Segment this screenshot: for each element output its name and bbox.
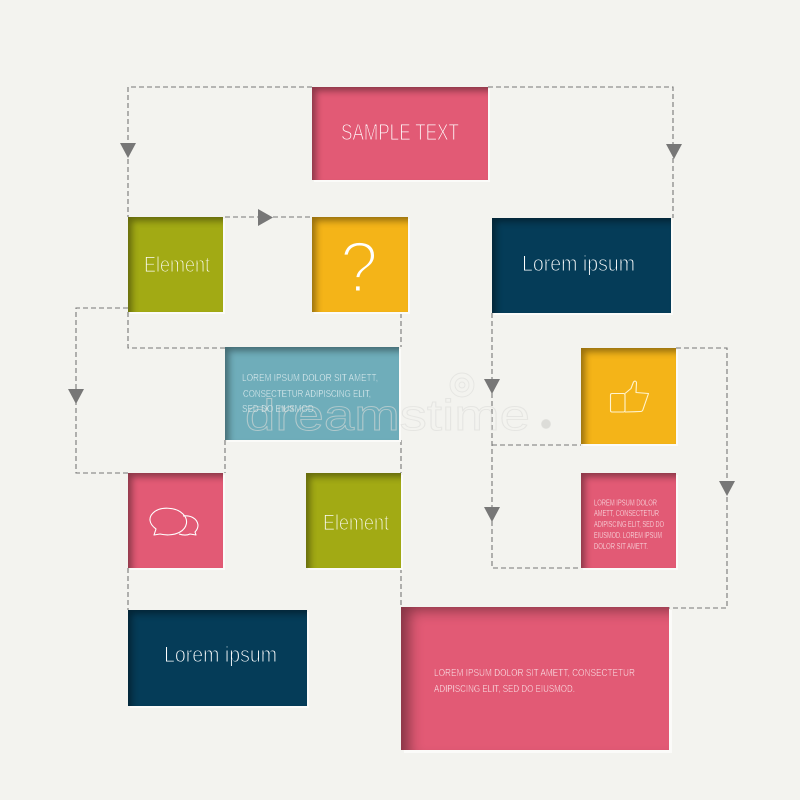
panel: large pink text	[401, 607, 669, 750]
panel: chat	[128, 473, 223, 568]
panel: sample text	[312, 87, 488, 180]
text block: small pink paragraph: DOLOR SIT AMETT.	[594, 542, 648, 551]
icon: question mark: ?	[340, 228, 378, 308]
arrow: right to question box	[258, 209, 273, 226]
arrow: down to Lorem ipsum	[666, 144, 682, 159]
panel: small pink text	[581, 473, 676, 568]
text block: teal paragraph	[242, 372, 378, 415]
panel: element olive top	[128, 217, 223, 312]
text block: small pink paragraph: LOREM IPSUM DOLOR	[594, 498, 657, 508]
panel: teal text	[225, 347, 399, 440]
watermark: dreamstime	[245, 391, 530, 440]
text block: large pink paragraph	[434, 667, 635, 695]
text block: small pink paragraph	[594, 498, 664, 551]
panel: lorem ipsum navy top	[492, 218, 671, 313]
arrow: down to large pink box	[719, 481, 735, 496]
panel: lorem ipsum navy bottom	[128, 610, 307, 706]
panel: question	[312, 217, 408, 312]
panel: element olive lower	[306, 473, 401, 568]
arrow: down right column lower	[484, 507, 500, 522]
text block: large pink paragraph: ADIPISCING ELIT, SED DO EIUSMOD.	[434, 683, 575, 695]
panel: thumbs up	[581, 348, 676, 444]
label: lorem ipsum: Lorem ipsum	[164, 642, 277, 667]
icon: speech bubbles	[150, 508, 198, 535]
arrow: down to Element	[120, 143, 136, 158]
arrow: down to chat box	[68, 389, 84, 404]
icon: thumbs up	[610, 381, 648, 412]
arrow: down right column upper	[484, 379, 500, 394]
label: element: Element	[144, 252, 210, 277]
label: lorem ipsum: Lorem ipsum	[522, 251, 635, 276]
text block: teal paragraph: SED DO EIUSMOD.	[242, 403, 316, 415]
